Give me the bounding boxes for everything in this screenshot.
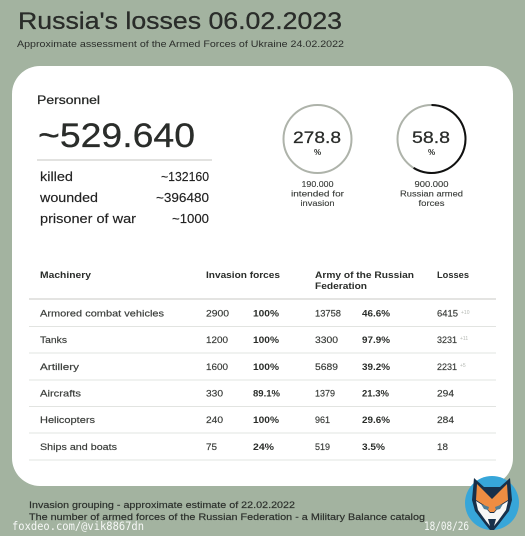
row: artillery: 39.2%	[362, 362, 391, 373]
row: ships and boats	[40, 442, 448, 453]
icon: fox logo	[465, 476, 519, 530]
row: aircrafts: 21.3%	[362, 388, 390, 400]
row: helicopters: Helicopters	[40, 415, 95, 426]
personnel breakdown: killed	[40, 170, 73, 184]
ring: 278.8 percent of invasion force	[284, 105, 352, 208]
row: helicopters: 284	[437, 415, 454, 426]
title: Russia's losses 06.02.2023	[18, 8, 342, 35]
row: armored combat vehicles: +10	[461, 310, 470, 316]
row: armored combat vehicles: Armored combat vehicles	[40, 308, 164, 320]
ring: 278.8 percent of invasion force: %	[314, 148, 321, 157]
row: armored combat vehicles: 100%	[253, 308, 280, 320]
row: armored combat vehicles: 46.6%	[362, 308, 391, 320]
footnotes: The number of armed forces of the Russian Federation - a Military Balance catalog	[29, 512, 425, 523]
row: armored combat vehicles: 6415	[437, 308, 458, 320]
row: tanks	[40, 335, 468, 346]
watermark: url: foxdeo.com/@vik8867dn	[12, 519, 144, 533]
table: machinery	[29, 270, 496, 460]
row: aircrafts: 294	[437, 388, 454, 400]
row: artillery: Artillery	[40, 362, 79, 373]
personnel breakdown: ~396480	[156, 191, 209, 205]
ring: 278.8 percent of invasion force: 278.8	[293, 128, 341, 147]
row: tanks: 3231	[437, 335, 457, 346]
row: aircrafts: Aircrafts	[40, 388, 81, 400]
row: aircrafts: 1379	[315, 388, 335, 400]
row: helicopters: 240	[206, 415, 223, 426]
ring: 58.8 percent of Russian armed forces: forces	[418, 198, 444, 208]
ring: 58.8 percent of Russian armed forces: 900.000	[414, 179, 449, 189]
personnel breakdown: prisoner of war	[40, 212, 136, 226]
row: ships and boats: 18	[437, 442, 448, 453]
row: helicopters	[40, 415, 454, 426]
row: tanks: 1200	[206, 335, 228, 346]
row: tanks: Tanks	[40, 335, 67, 346]
row: ships and boats: 24%	[253, 442, 275, 453]
row: armored combat vehicles	[40, 308, 470, 320]
row: aircrafts: 89.1%	[253, 388, 281, 400]
ring: 58.8 percent of Russian armed forces: Russian armed	[400, 188, 463, 198]
personnel breakdown: ~132160	[161, 170, 209, 184]
table header	[40, 270, 469, 292]
footnotes	[29, 500, 425, 523]
subtitle: Approximate assessment of the Armed Forces of Ukraine 24.02.2022	[17, 39, 344, 50]
ring: 278.8 percent of invasion force: invasion	[300, 198, 335, 208]
row: helicopters: 29.6%	[362, 415, 391, 426]
table header: Losses	[437, 270, 469, 281]
row: helicopters: 961	[315, 415, 330, 426]
row: artillery: 1600	[206, 362, 228, 373]
row: artillery: 5689	[315, 362, 338, 373]
row: tanks: 3300	[315, 335, 338, 346]
row: aircrafts: 330	[206, 388, 223, 400]
watermark: date: 18/08/26	[424, 519, 469, 533]
personnel total: ~529.640	[38, 117, 195, 155]
row: helicopters: 100%	[253, 415, 280, 426]
personnel heading: Personnel	[37, 93, 100, 107]
table header: Machinery	[40, 270, 92, 281]
table header: Invasion forces	[206, 270, 280, 281]
table header: Army of the Russian	[315, 270, 414, 281]
row: artillery: +5	[460, 363, 466, 369]
ring: 58.8 percent of Russian armed forces	[398, 105, 466, 208]
row: ships and boats: 75	[206, 442, 217, 453]
footnotes: Invasion grouping - approximate estimate of 22.02.2022	[29, 500, 295, 511]
row: armored combat vehicles: 2900	[206, 308, 229, 320]
panel: main white card	[12, 66, 513, 486]
row: ships and boats: 3.5%	[362, 442, 386, 453]
row: ships and boats: Ships and boats	[40, 442, 117, 453]
row: tanks: 97.9%	[362, 335, 391, 346]
ring: 278.8 percent of invasion force: intended for	[291, 188, 344, 198]
row: tanks: +11	[460, 336, 468, 342]
ring: 58.8 percent of Russian armed forces: 58.8	[412, 128, 450, 147]
personnel breakdown: ~1000	[172, 212, 209, 226]
ring: 278.8 percent of invasion force: 190.000	[302, 179, 334, 189]
row: artillery: 100%	[253, 362, 280, 373]
row: artillery: 2231	[437, 362, 457, 373]
row: tanks: 100%	[253, 335, 280, 346]
personnel breakdown	[39, 170, 209, 226]
row: aircrafts	[40, 388, 454, 400]
row: ships and boats: 519	[315, 442, 330, 453]
table header: Federation	[315, 281, 367, 292]
row: artillery	[40, 362, 466, 373]
row: armored combat vehicles: 13758	[315, 308, 341, 320]
personnel breakdown: wounded	[39, 191, 98, 205]
ring: 58.8 percent of Russian armed forces: %	[428, 148, 435, 157]
